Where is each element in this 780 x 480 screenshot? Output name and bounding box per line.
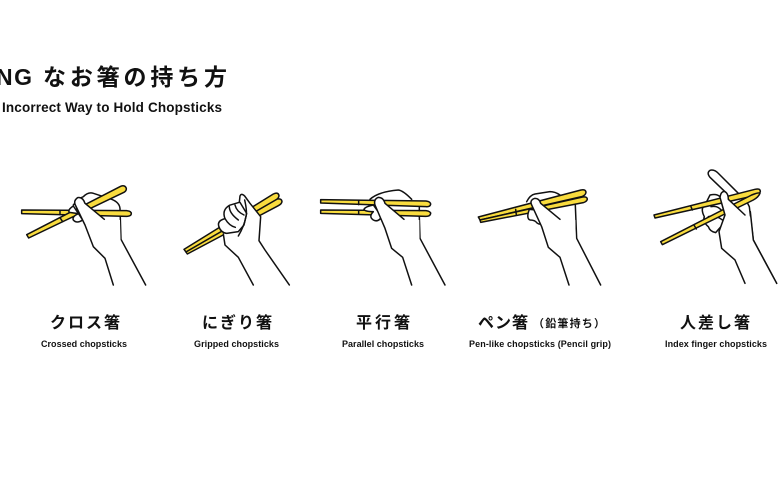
caption: index finger: Index finger chopsticks: [665, 339, 767, 349]
label: index finger: 人差し箸: [680, 313, 750, 332]
label: gripped: にぎり箸: [202, 313, 272, 332]
illustration: pen-like chopsticks: [478, 190, 601, 285]
label: pencil grip: （鉛筆持ち）: [533, 316, 605, 330]
caption: pen-like: Pen-like chopsticks (Pencil grip): [469, 339, 611, 349]
illustration: parallel chopsticks: [321, 190, 445, 285]
illustration: crossed chopsticks: [22, 186, 146, 285]
title: なお箸の持ち方: [43, 64, 227, 90]
label: pen-like: ペン箸: [478, 313, 528, 332]
label: crossed: クロス箸: [50, 313, 120, 332]
caption: parallel: Parallel chopsticks: [342, 339, 424, 349]
subtitle: Incorrect Way to Hold Chopsticks: [2, 100, 222, 115]
caption: crossed: Crossed chopsticks: [41, 339, 127, 349]
label: parallel: 平行箸: [356, 313, 410, 332]
illustration: index finger chopsticks: [654, 170, 777, 283]
caption: gripped: Gripped chopsticks: [194, 339, 279, 349]
illustration: gripped chopsticks: [184, 193, 289, 285]
